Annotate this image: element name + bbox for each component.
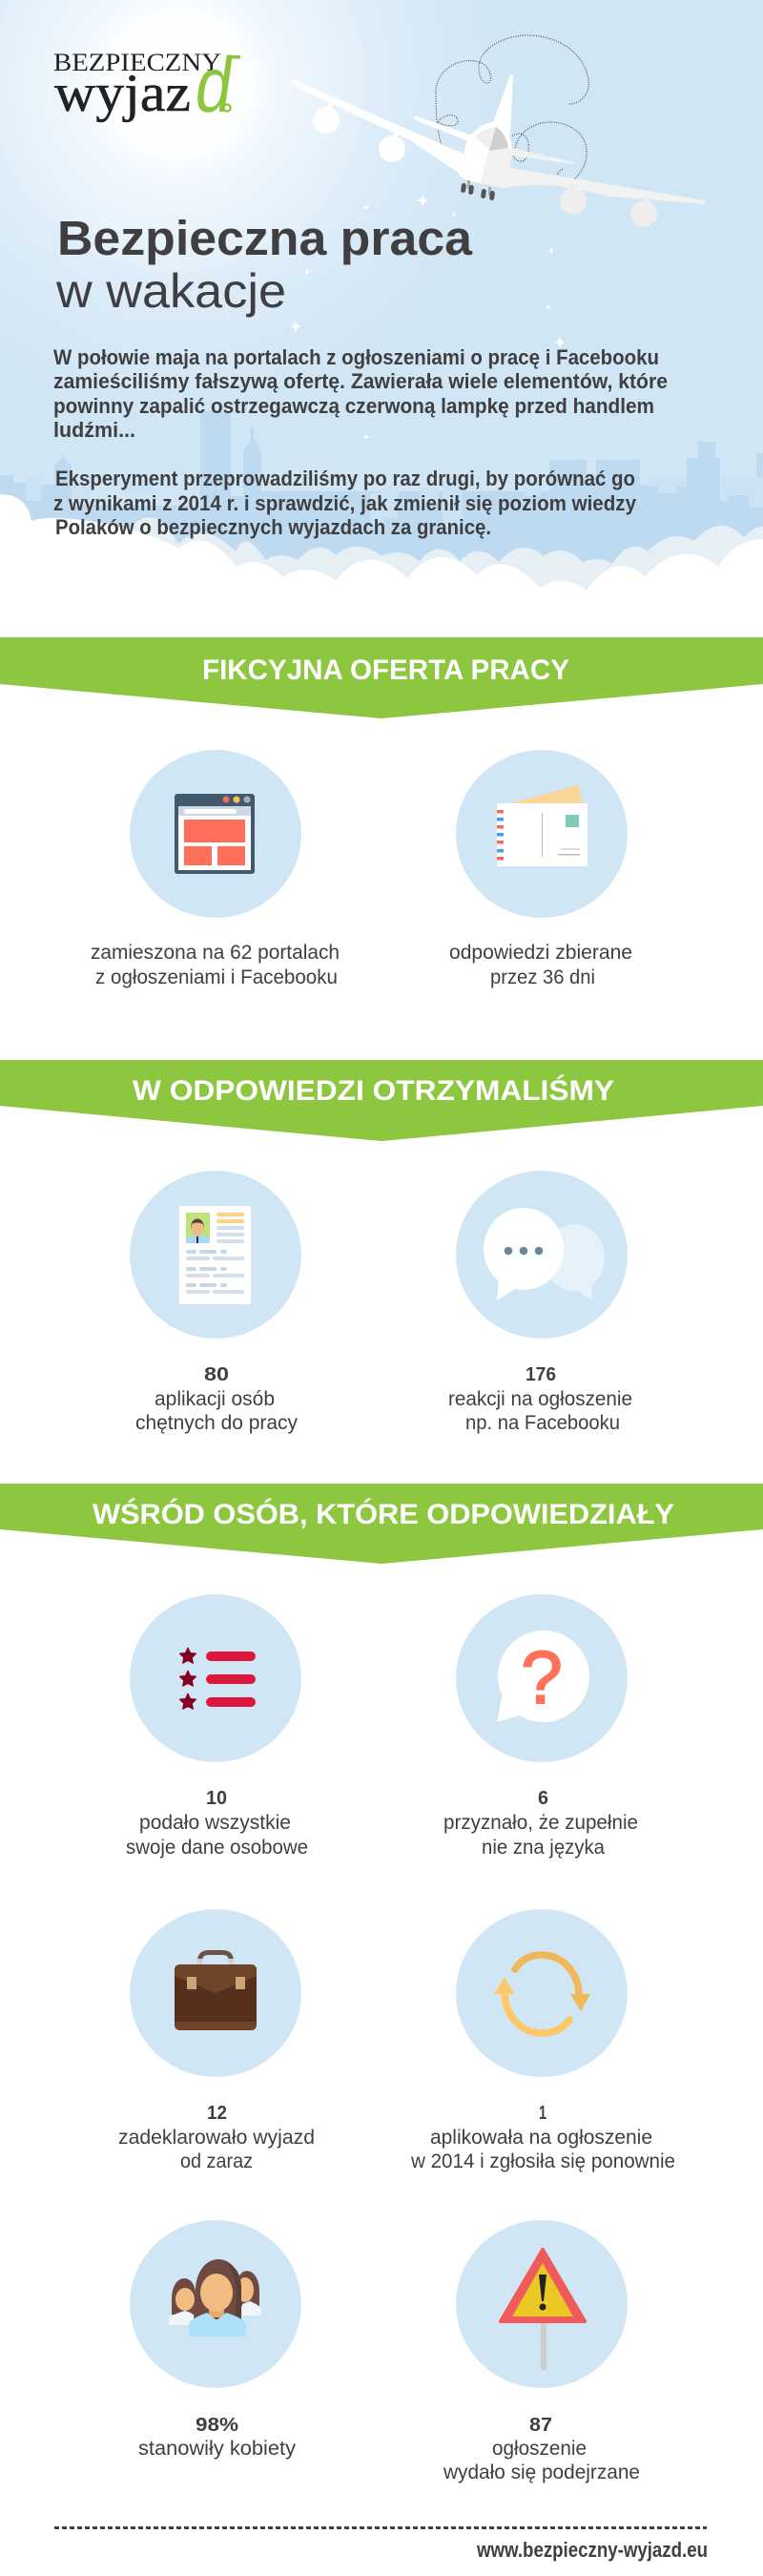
right stabilizer [511,148,575,164]
item: 62 portals: z ogłoszeniami i Facebooku [95,966,338,988]
icon: postcard with envelope [497,785,588,866]
icon: question bubble: ? [521,1635,563,1719]
item: 12 leave immediately [118,1909,315,2172]
sparkles [289,192,567,441]
icon: question bubble [497,1631,589,1722]
item: 98% women: stanowiły kobiety [138,2438,297,2460]
tail fin [493,74,513,135]
left stabilizer [414,116,475,143]
item: 62 portals: zamieszona na 62 portalach [91,942,340,964]
city skyline [0,411,763,611]
item: 6 no language: 6 [538,1788,548,1809]
item: 98% women [130,2220,301,2460]
intro text: powinny zapalić ostrzegawczą czerwoną lampkę przed handlem [53,394,654,418]
airplane [292,74,706,227]
logo: BEZPIECZNY [53,49,221,76]
item: 12 leave immediately: zadeklarowało wyjazd [118,2127,315,2149]
title [55,211,473,318]
tail cone [475,127,496,151]
icon: cv document [179,1206,251,1304]
item: 36 days: przez 36 dni [490,966,595,988]
banner: w odpowiedzi otrzymaliśmy [0,1060,763,1141]
fuselage [458,121,512,183]
icon: chat bubbles [484,1208,605,1300]
header sky background [0,0,763,637]
item: 176 reactions [448,1171,632,1434]
landing gear [461,180,495,200]
flight path trails [436,35,588,178]
intro text: zamieściliśmy fałszywą ofertę. Zawierała wiele elementów, które [53,369,668,393]
item: 62 portals [91,750,340,988]
item: 98% women: 98% [196,2415,238,2436]
right engines [560,183,657,227]
logo: wyjaz [54,64,191,123]
item: 1 repeat applicant: aplikowała na ogłoszenie [430,2127,652,2149]
intro text: W połowie maja na portalach z ogłoszeniami o pracę i Facebooku [53,345,659,369]
title: w wakacje [55,264,286,318]
footer url: www.bezpieczny-wyjazd.eu [476,2538,708,2562]
item: 176 reactions: np. na Facebooku [465,1412,620,1434]
back cloud layer [124,517,763,620]
logo: d [190,41,238,129]
item: 6 no language [443,1594,638,1859]
left engines [313,103,405,162]
icon: star list [180,1649,256,1709]
item: 1 repeat applicant: w 2014 i zgłosiła się ponownie [410,2150,675,2172]
item: 176 reactions: reakcji na ogłoszenie [448,1388,632,1410]
item: 80 applications: 80 [204,1364,229,1385]
item: 87 suspicious: wydało się podejrzane [443,2462,640,2483]
item: 87 suspicious: 87 [529,2415,552,2436]
item: 80 applications: aplikacji osób [155,1388,275,1410]
front cloud layer [0,494,763,639]
intro text: ludźmi... [53,418,135,442]
banner: wśród osób, które odpowiedziały: WŚRÓD OSÓB, KTÓRE ODPOWIEDZIAŁY [93,1498,674,1530]
item: 1 repeat applicant [410,1909,675,2172]
banner: fikcyjna oferta pracy: FIKCYJNA OFERTA PRACY [202,654,569,686]
item: 10 personal data [126,1594,308,1859]
item: 12 leave immediately: od zaraz [180,2150,253,2172]
item: 10 personal data: swoje dane osobowe [126,1837,308,1859]
logo [53,41,240,129]
icon: briefcase [175,1952,257,2030]
icon: warning sign [501,2250,585,2370]
icon: cycle arrows [494,1955,590,2033]
item: 80 applications [130,1171,301,1434]
banner: wśród osób, które odpowiedziały [0,1484,763,1564]
item: 176 reactions: 176 [526,1364,556,1385]
item: 36 days: odpowiedzi zbierane [449,942,632,964]
icon: three women [169,2259,261,2337]
item: 87 suspicious: ogłoszenie [492,2438,587,2460]
item: 10 personal data: 10 [206,1788,227,1809]
item: 6 no language: przyznało, że zupełnie [443,1812,638,1834]
intro text: Eksperyment przeprowadziliśmy po raz drugi, by porównać go [55,467,635,490]
right wing [503,168,706,204]
icon: browser window [175,794,255,874]
item: 36 days [449,750,632,988]
title: Bezpieczna praca [57,211,473,265]
banner: w odpowiedzi otrzymaliśmy: W ODPOWIEDZI OTRZYMALIŚMY [133,1074,614,1107]
intro text: Polaków o bezpiecznych wyjazdach za granicę. [55,515,491,539]
item: 1 repeat applicant: 1 [539,2103,546,2124]
left wing [292,80,467,174]
intro text [53,345,668,539]
item: 6 no language: nie zna języka [482,1837,605,1859]
banner: fikcyjna oferta pracy [0,637,763,718]
item: 87 suspicious [443,2220,640,2483]
intro text: z wynikami z 2014 r. i sprawdzić, jak zmienił się poziom wiedzy [53,491,637,515]
item: 80 applications: chętnych do pracy [135,1412,298,1434]
item: 12 leave immediately: 12 [207,2103,227,2124]
item: 10 personal data: podało wszystkie [139,1812,291,1834]
